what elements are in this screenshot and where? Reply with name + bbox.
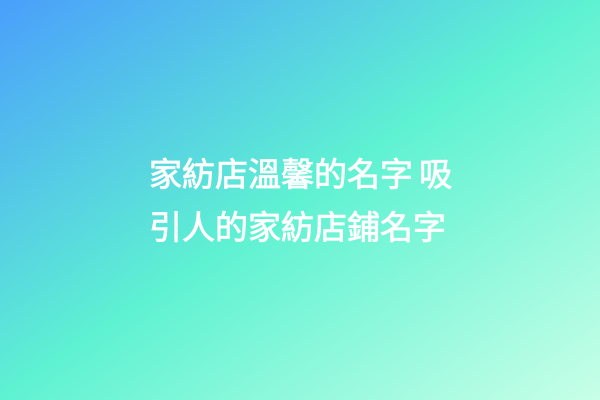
- title line 1: 家紡店溫馨的名字 吸: [149, 156, 452, 193]
- title: [149, 156, 452, 246]
- title line 2: 引人的家紡店鋪名字: [149, 209, 446, 246]
